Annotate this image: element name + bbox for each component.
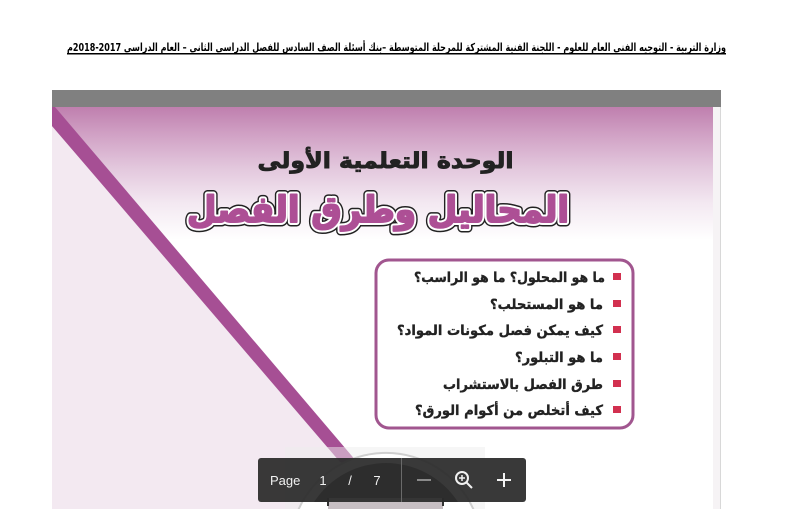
question 1: ما هو المحلول؟ ما هو الراسب؟ <box>414 270 605 286</box>
question 4: ما هو التبلور؟ <box>515 350 603 366</box>
question 2: ما هو المستحلب؟ <box>490 297 603 313</box>
main title: المحاليل وطرق الفصل <box>187 190 569 231</box>
icon: zoom <box>456 472 472 488</box>
question 5: طرق الفصل بالاستشراب <box>443 377 603 393</box>
light triangle <box>52 126 382 509</box>
pink gradient header <box>52 107 713 240</box>
main title: المحاليل وطرق الفصل <box>187 190 569 231</box>
icon: minus <box>417 479 431 481</box>
circular photo at page bottom <box>285 447 485 509</box>
textbook page <box>52 107 721 509</box>
main title: المحاليل وطرق الفصل <box>187 190 569 231</box>
page toolbar <box>258 458 526 502</box>
icon: plus <box>497 473 511 487</box>
question 6: كيف أتخلص من أكوام الورق؟ <box>415 401 604 419</box>
questions box <box>376 260 633 428</box>
unit title: الوحدة التعلمية الأولى <box>258 146 514 174</box>
right margin strip <box>713 107 720 509</box>
page label: Page <box>270 473 300 488</box>
page number: 1 <box>319 473 327 488</box>
diagonal band <box>52 107 357 468</box>
grey top bar <box>52 90 721 107</box>
page total: 7 <box>373 473 381 488</box>
question 3: كيف يمكن فصل مكونات المواد؟ <box>397 323 604 339</box>
slash: / <box>348 473 352 488</box>
